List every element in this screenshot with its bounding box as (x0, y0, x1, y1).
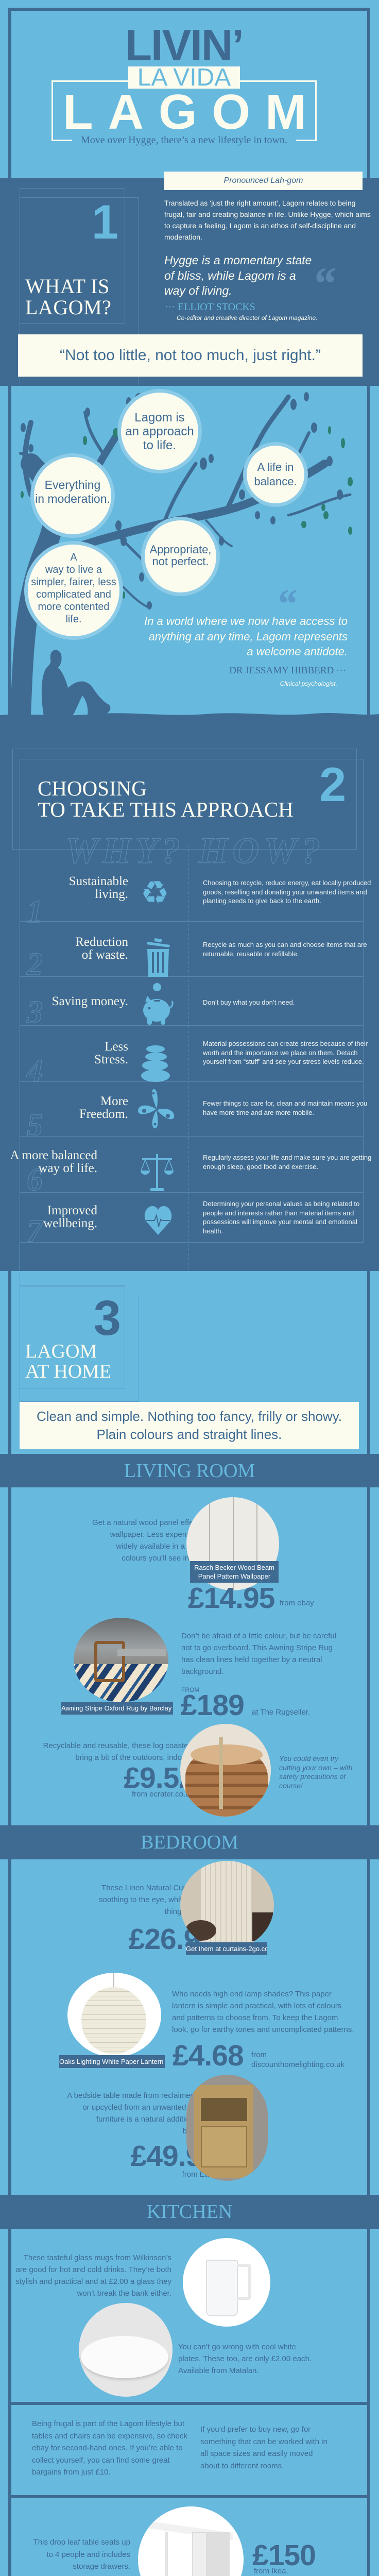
title: LAGOM: L (63, 84, 93, 140)
quote: dr jessamy hibberd: In a world where we now have access to (144, 615, 348, 628)
row 7: improved wellbeing: Determining your personal values as being related to (203, 1200, 359, 1208)
product: rug: Don’t be afraid of a little colour, but be careful (181, 1632, 336, 1640)
product: lantern: £4.68 (173, 2039, 244, 2072)
band: bedroom: BEDROOM (141, 1832, 238, 1853)
icon: quote mark: “ (312, 258, 335, 309)
product: curtains (99, 1861, 274, 1956)
product: curtains: soothing to the eye, while keeping (99, 1895, 215, 1904)
photo: mug (183, 2238, 270, 2327)
row 6: balanced way of life: way of life. (38, 1161, 97, 1175)
heading: choosing to take this approach: CHOOSING (38, 776, 147, 800)
bubble: lagom is an approach: to life. (143, 438, 176, 452)
divider bars (8, 2402, 370, 2405)
bubble: appropriate not perfect (145, 520, 216, 592)
definition text: Translated as ‘just the right amount’, Lagom relates to being (164, 199, 355, 207)
product: drop leaf table (33, 2506, 316, 2576)
text: frugal tips: tables and chairs can be expensive, so check (32, 2432, 187, 2440)
photo: table (138, 2506, 244, 2576)
bubble: a way to live: simpler, fairer, less (31, 577, 116, 588)
quote: hygge (164, 253, 312, 297)
callout: clean and simple (20, 1402, 359, 1449)
product: glass mugs: are good for hot and cold drinks. They’re both (16, 2265, 171, 2274)
row 7: improved wellbeing: health. (203, 1227, 223, 1234)
product: wallpaper: wallpaper. Less expensive and (110, 1530, 215, 1539)
row 2: reduction of waste (75, 935, 367, 977)
product: rug: FROM (181, 1686, 199, 1693)
photo: log coasters (180, 1724, 271, 1817)
person silhouette (42, 650, 110, 716)
text: frugal tips: ebay for second-hand ones. If you’re able to (32, 2444, 183, 2452)
quote: dr jessamy hibberd: DR JESSAMY HIBBERD ··· (229, 665, 346, 676)
product: drop leaf table: from Ikea. (254, 2567, 288, 2575)
text: 1 (27, 894, 43, 929)
number 2: 2 (319, 757, 346, 811)
photo: plate (79, 2303, 173, 2397)
bubble: a way to live (28, 545, 119, 636)
pronounced box (164, 172, 363, 190)
text: 4 (26, 1054, 43, 1089)
icon: bin (147, 938, 170, 977)
pronounced box: Pronounced Lah-gom (224, 176, 303, 185)
product: rug: background. (181, 1667, 224, 1676)
product: bedside table: or upcycled from an unwanted piece of (82, 2103, 215, 2112)
heading: choosing to take this approach: TO TAKE THIS APPROACH (38, 798, 294, 821)
subtitle: Move over Hygge, there’s a new lifestyle in town. (81, 134, 287, 146)
text: frugal tips: bargains from just £10. (32, 2468, 111, 2477)
product: bedside table: A bedside table made from reclaimed wood (67, 2091, 215, 2100)
row 1: sustainable living (69, 874, 371, 911)
product: log coasters: course! (279, 1782, 303, 1790)
callout: not too little (18, 334, 363, 377)
product: glass mugs: stylish and practical and at £2.00 a glass they (15, 2277, 171, 2286)
row 6: balanced way of life: Regularly assess your life and make sure you are getting (203, 1154, 371, 1161)
product: bedside table (67, 2075, 268, 2181)
product: rug: at The Rugseller. (252, 1708, 310, 1717)
outline box (51, 80, 317, 141)
product: plates (79, 2303, 312, 2397)
band: kitchen: KITCHEN (147, 2201, 232, 2223)
heading: lagom at home (25, 1341, 111, 1382)
row 2: reduction of waste: Recycle as much as you can and choose items that are (203, 941, 367, 948)
title: LAGOM: O (212, 84, 250, 140)
row 4: less stress (94, 1040, 368, 1082)
heading: lagom at home: LAGOM (25, 1341, 97, 1362)
product: wallpaper: colours you’ll see in nature. (122, 1554, 215, 1563)
photo: rug (74, 1618, 168, 1702)
product: log coasters: cutting your own – with (279, 1763, 352, 1771)
product: lantern: look, go for earthy tones and uncomplicated patterns. (172, 2025, 354, 2034)
quote: dr jessamy hibberd: anything at any time, Lagom represents (149, 630, 348, 643)
row 3: saving money (52, 983, 295, 1025)
title: LAGOM: A (108, 84, 144, 140)
callout: not too little: “Not too little, not too much, just right.” (60, 347, 321, 364)
icon: scales (141, 1154, 174, 1191)
product: wallpaper: widely available in a range of (116, 1542, 215, 1551)
row 7: improved wellbeing: people and interests rather than material items and (203, 1209, 354, 1217)
text: 6 (27, 1162, 43, 1197)
bubble: a life in balance: A life in (257, 461, 294, 473)
section 1: what is lagom (0, 178, 379, 386)
band: living room: LIVING ROOM (124, 1460, 255, 1482)
text: frugal tips: about to different rooms. (200, 2462, 284, 2470)
text: frugal tips (32, 2419, 328, 2477)
product: log coasters: £9.52 (124, 1761, 195, 1794)
product: rug (61, 1618, 336, 1722)
row 3: saving money: Don’t buy what you don’t need. (203, 998, 295, 1006)
product: log coasters: You could even try (279, 1754, 338, 1762)
section 3: lagom at home (20, 1242, 359, 1449)
row 2: reduction of waste: of waste. (82, 948, 128, 961)
product: glass mugs (15, 2238, 270, 2327)
callout: clean and simple: Plain colours and straight lines. (97, 1427, 282, 1442)
section 2: choosing approach (0, 721, 379, 1271)
frame sides (8, 8, 11, 2576)
heading: lagom at home: AT HOME (25, 1361, 111, 1382)
row 5: more freedom: Freedom. (79, 1107, 128, 1121)
text: frugal tips: If you’d prefer to buy new, go for (200, 2425, 311, 2434)
row 7: improved wellbeing: possessions will improve your mental and emotional (203, 1218, 357, 1226)
definition text: to capture a feeling, Lagom is an ethos of self-discipline and (164, 222, 356, 230)
product: lantern: from (251, 2050, 267, 2059)
bubble: appropriate not perfect: Appropriate, (150, 543, 211, 556)
text: WHY? (65, 830, 180, 871)
bubble: lagom is an approach: an approach (125, 425, 194, 438)
bubble: everything in moderation (34, 457, 111, 534)
product: plates: You can’t go wrong with cool white (178, 2343, 296, 2351)
title: LIVIN': LIVIN’ (125, 21, 243, 70)
product: rug: not to go overboard. This Awning Stripe Rug (181, 1643, 333, 1652)
row 1: sustainable living: planting seeds to give back to the earth. (203, 897, 321, 905)
band: bedroom (0, 1825, 379, 1859)
quote: hygge: way of living. (164, 284, 232, 297)
quote: hygge: of bliss, while Lagom is a (164, 269, 296, 282)
row 7: improved wellbeing: wellbeing. (43, 1216, 97, 1230)
row 5: more freedom: More (100, 1094, 128, 1108)
photo: wallpaper (186, 1497, 279, 1590)
product: glass mugs: These tasteful glass mugs from Wilkinson’s (24, 2253, 171, 2262)
number 1: 1 (92, 195, 118, 249)
bubble: a life in balance: balance. (254, 475, 297, 488)
photo: curtains (180, 1861, 274, 1950)
product: log coasters: safety precautions of (279, 1772, 346, 1781)
icon: stones (141, 1045, 170, 1082)
row 6: balanced way of life: enough sleep, good food and exercise. (203, 1162, 318, 1171)
row 1: sustainable living: Sustainable (69, 874, 128, 888)
row 1: sustainable living: goods, reselling and donating your unwanted items and (203, 888, 367, 895)
text: frugal tips: all space sizes and easily moved (200, 2449, 313, 2458)
product: lantern: lantern is simple and practical, with lots of colours (172, 2002, 341, 2010)
product: rug: has clean lines held together by a neutral (181, 1655, 322, 1664)
quote: dr jessamy hibberd: Clinical psychologist. (280, 680, 337, 687)
product: log coasters: bring a bit of the outdoors, indoors. (75, 1753, 195, 1762)
text: HOW? (198, 830, 320, 871)
band: kitchen (0, 2195, 379, 2229)
icon: recycle: ♻ (141, 874, 169, 911)
product: curtains: things low-key. (165, 1907, 215, 1916)
text: frugal tips: collect yourself, you can find some great (32, 2455, 170, 2465)
heading: choosing to take this approach (38, 776, 294, 821)
title: LAGOM (63, 84, 306, 140)
photo: bedside table (186, 2075, 268, 2181)
row 7: improved wellbeing (43, 1200, 359, 1235)
product: bedside table: bedroom. (183, 2127, 215, 2136)
product: bedside table: furniture is a natural addition to the (96, 2115, 215, 2124)
bubble: everything in moderation: Everything (45, 478, 100, 492)
attribution: elliot stocks: ··· ELLIOT STOCKS (165, 301, 255, 313)
bubble: a way to live: A (70, 552, 77, 563)
product: rug: £189 (181, 1689, 244, 1722)
row 2: reduction of waste: Reduction (75, 935, 128, 949)
row 4: less stress: worth and the importance we place on them. Detach (203, 1049, 358, 1056)
bubble: a way to live: complicated and (36, 589, 111, 600)
product: plates: Available from Matalan. (178, 2366, 259, 2375)
text: 5 (27, 1108, 43, 1143)
product: drop leaf table: to 4 people and includes (46, 2550, 130, 2558)
definition text: moderation. (164, 233, 202, 241)
product: plates: plates. These too, are only £2.00 each. (178, 2354, 312, 2363)
bubble: a life in balance (247, 446, 304, 503)
product: wallpaper: Panel Pattern Wallpaper (198, 1572, 270, 1580)
product: wallpaper (92, 1497, 314, 1615)
product: lantern: discounthomelighting.co.uk (251, 2060, 344, 2069)
photo: lantern (67, 1973, 161, 2057)
product: wallpaper: from ebay (280, 1599, 314, 1607)
product: glass mugs: won’t break the bank either. (77, 2289, 171, 2298)
bubble: a way to live: more contented (38, 601, 109, 613)
text: 7 (27, 1214, 44, 1249)
product: bedside table: from Etsy. (182, 2170, 216, 2179)
quote: dr jessamy hibberd: a welcome antidote. (247, 645, 348, 658)
product: lantern (59, 1973, 354, 2072)
bubble: appropriate not perfect: not perfect. (152, 555, 209, 568)
text: 3 (26, 995, 43, 1030)
product: log coasters: Recyclable and reusable, these log coasters (43, 1741, 195, 1750)
row 3: saving money: Saving money. (52, 994, 128, 1008)
product: log coasters (43, 1724, 352, 1817)
product: wallpaper: Rasch Becker Wood Beam (194, 1564, 274, 1571)
row 4: less stress: Stress. (94, 1052, 128, 1066)
bubble: a way to live: life. (65, 614, 82, 625)
product: lantern: Who needs high end lamp shades? This paper (172, 1990, 332, 1998)
definition text: frugal, fair and creating balance in life. Unlike Hygge, which aims (164, 210, 371, 218)
row 1: sustainable living: Choosing to recycle, reduce energy, eat locally produced (203, 879, 371, 887)
text: 2 (26, 947, 43, 982)
product: drop leaf table: storage drawers. (73, 2562, 130, 2571)
product: curtains: FROM (198, 1920, 216, 1927)
row 2: reduction of waste: returnable, reusable or refillable. (203, 950, 299, 957)
row 4: less stress: Less (105, 1040, 128, 1054)
product: bedside table: £49.99 (131, 2140, 217, 2173)
hero title (51, 21, 317, 146)
ground (0, 713, 379, 726)
icon: quote mark: “ (276, 582, 297, 627)
row 1: sustainable living: living. (95, 887, 128, 901)
row 6: balanced way of life: A more balanced (10, 1148, 97, 1162)
number 3: 3 (94, 1291, 121, 1346)
product: drop leaf table: £150 (252, 2539, 316, 2572)
bubble: lagom is an approach: Lagom is (134, 410, 185, 425)
row 6: balanced way of life (10, 1148, 371, 1191)
title: LAGOM: G (159, 84, 197, 140)
text: frugal tips: Being frugal is part of the Lagom lifestyle but (32, 2419, 184, 2428)
bubble: lagom is an approach (121, 393, 198, 470)
row 5: more freedom: have more time and are more mobile. (203, 1109, 314, 1116)
row 5: more freedom: Fewer things to care for, clean and maintain means you (203, 1099, 367, 1107)
heading: what is lagom: WHAT IS (25, 275, 110, 298)
icon: heart (144, 1206, 172, 1235)
bubble: a way to live: way to live a (45, 564, 102, 575)
row 4: less stress: Material possessions can create stress because of their (203, 1040, 368, 1047)
product: wallpaper: Get a natural wood panel effect with (92, 1518, 215, 1527)
quote: dr jessamy hibberd (144, 582, 348, 687)
heading: what is lagom: LAGOM? (25, 296, 111, 319)
bubble: everything in moderation: in moderation. (35, 492, 110, 505)
definition text (164, 199, 371, 241)
callout: clean and simple: Clean and simple. Nothing too fancy, frilly or showy. (37, 1409, 342, 1424)
heading: what is lagom (25, 275, 111, 319)
text: frugal tips: something that can be worked with in (200, 2437, 328, 2446)
product: log coasters: from ecrater.co.uk (132, 1790, 194, 1799)
icon: piggy bank (143, 983, 174, 1025)
band: living room (0, 1454, 379, 1487)
product: curtains: These Linen Natural Curtains are (101, 1884, 215, 1892)
product: wallpaper: £14.95 (188, 1582, 274, 1615)
row 4: less stress: yourself from “stuff” and see your stress levels reduce. (203, 1058, 364, 1065)
quote: hygge: Hygge is a momentary state (164, 253, 312, 267)
product: curtains: £26.98 (129, 1923, 215, 1956)
product: lantern: and patterns to choose from. To keep the Lagom (172, 2013, 338, 2022)
row 7: improved wellbeing: Improved (47, 1204, 97, 1217)
section 1: what is lagom: Co-editor and creative director of Lagom magazine. (177, 314, 317, 321)
icon: butterfly (138, 1089, 174, 1128)
row 5: more freedom (79, 1089, 367, 1128)
title: LAGOM: M (265, 84, 306, 140)
product: drop leaf table: This drop leaf table seats up (33, 2538, 130, 2547)
tree illustration (0, 392, 379, 721)
